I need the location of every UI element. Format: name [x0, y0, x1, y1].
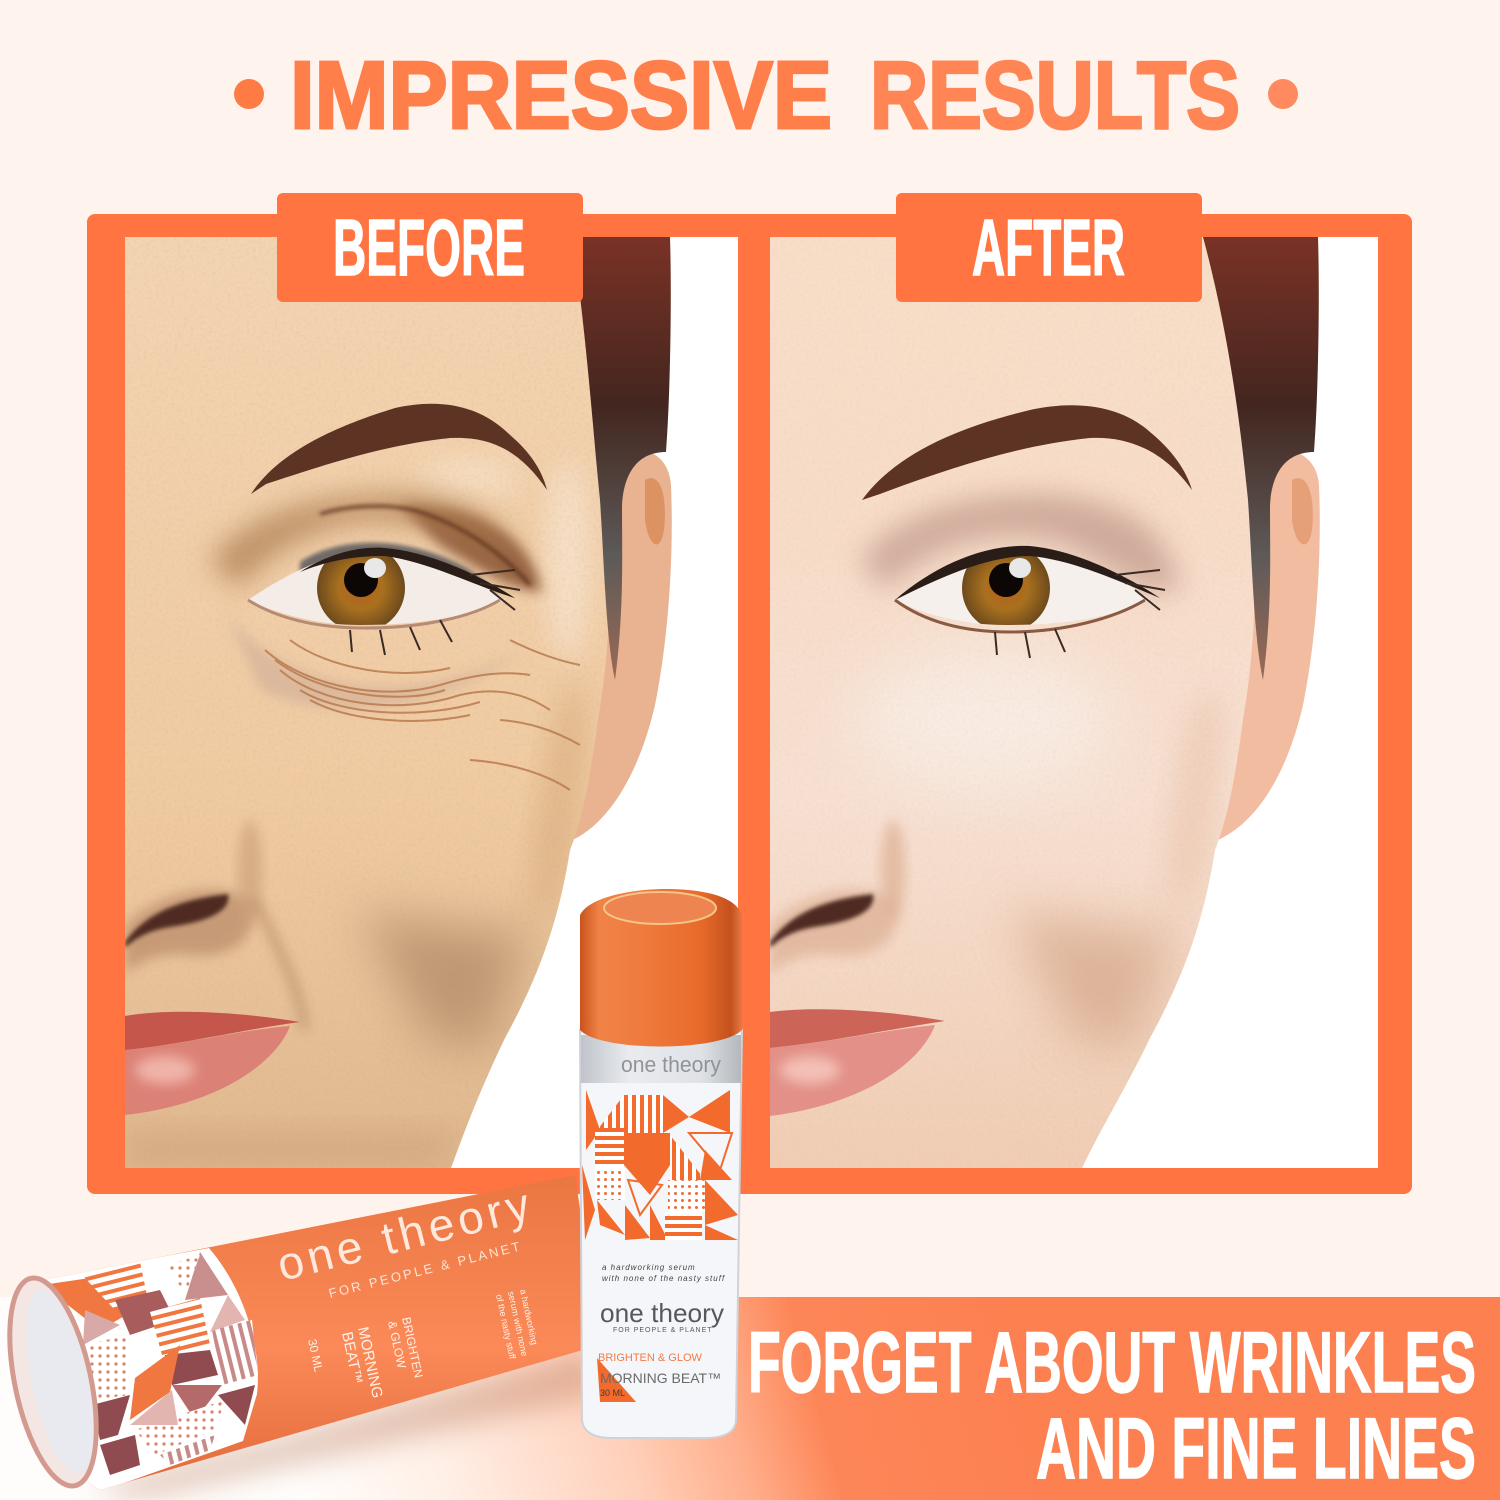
panel: before photo	[125, 237, 738, 1168]
bottle pattern	[582, 1090, 738, 1240]
lash line	[300, 548, 515, 598]
bottom gradient band	[0, 1297, 1500, 1500]
label: before: BEFORE	[333, 203, 525, 292]
tube body	[26, 1175, 600, 1490]
tube side copy: 30 ML	[305, 1338, 326, 1374]
tube tagline: FOR PEOPLE & PLANET	[327, 1238, 524, 1301]
lashes	[350, 570, 520, 655]
eye socket shadow	[400, 505, 542, 592]
tube side copy: BRIGHTEN	[399, 1316, 426, 1379]
eye white	[248, 550, 505, 625]
cap top	[604, 892, 716, 924]
under-eye wrinkles	[265, 640, 580, 790]
bottle corner triangle	[597, 1358, 636, 1402]
lips	[770, 1009, 945, 1116]
pupil	[344, 563, 378, 597]
skin	[770, 237, 1255, 1168]
tube shadow	[90, 1350, 600, 1500]
eyebrow	[862, 405, 1192, 500]
tube side copy: a hardworking	[518, 1288, 540, 1346]
lashes	[995, 570, 1165, 658]
ear	[1218, 454, 1320, 840]
bottle body	[580, 1030, 742, 1438]
temple highlight	[548, 460, 588, 660]
hair	[1203, 237, 1319, 680]
bottle variant copy: MORNING BEAT™	[600, 1370, 721, 1386]
catchlight	[364, 558, 386, 578]
crease	[320, 506, 530, 585]
title word one: IMPRESSIVE	[290, 42, 832, 149]
eyebrow	[251, 404, 547, 494]
iris	[962, 544, 1050, 632]
panel: after photo	[770, 237, 1378, 1168]
eye	[895, 544, 1165, 658]
nose wing shade	[881, 820, 905, 920]
band logo: one theory	[621, 1052, 721, 1077]
tube side copy: of the nasty stuff	[494, 1293, 518, 1360]
nose underside shade	[770, 890, 898, 975]
tube side copy	[305, 1288, 540, 1400]
title word two: RESULTS	[870, 42, 1240, 149]
bottle variant copy: 30 ML	[600, 1388, 625, 1398]
eye	[248, 543, 520, 655]
label: after	[896, 193, 1202, 302]
bottle copy: one theory	[600, 1298, 724, 1328]
eye socket shadow	[860, 494, 1180, 592]
brow bone highlight	[420, 460, 520, 496]
tube end rim	[0, 1270, 112, 1494]
bottle copy: a hardworking serum	[602, 1263, 696, 1272]
tube logo: one theory	[272, 1178, 535, 1291]
bottle copy: FOR PEOPLE & PLANET	[613, 1327, 713, 1334]
eye white	[895, 550, 1150, 625]
lips	[125, 1012, 300, 1115]
skin grain	[136, 239, 593, 641]
tube side copy: BEAT™	[338, 1330, 366, 1386]
comparison frame	[87, 214, 1412, 1194]
tube side copy: MORNING	[354, 1325, 386, 1400]
nose underside shade	[125, 890, 253, 975]
title bullet right	[1268, 79, 1298, 109]
ear	[574, 454, 672, 840]
tube side copy: serum with none	[506, 1290, 530, 1357]
lower lip	[125, 1026, 290, 1115]
label: before	[277, 193, 583, 302]
title bullet left	[234, 79, 264, 109]
bottle copy: with none of the nasty stuff	[602, 1274, 725, 1283]
iris	[317, 556, 405, 625]
tube end cap	[13, 1284, 107, 1480]
hair	[572, 237, 671, 680]
product: serum bottle	[580, 889, 742, 1438]
bottle copy	[600, 1263, 725, 1334]
bottom headline	[748, 1315, 1476, 1497]
nostril	[125, 894, 228, 948]
nose	[770, 820, 905, 975]
jaw and cheek shadow	[360, 910, 530, 1050]
skin	[125, 237, 610, 1168]
bottle variant copy	[598, 1352, 721, 1398]
lash line	[895, 546, 1160, 600]
bottle variant copy: BRIGHTEN & GLOW	[598, 1352, 703, 1364]
nasolabial fold	[255, 900, 305, 1030]
skin grain	[770, 237, 1270, 1168]
nose wing shade	[238, 820, 262, 920]
nose	[125, 820, 262, 975]
upper lip	[770, 1009, 945, 1048]
nostril	[770, 894, 873, 948]
tube side copy: & GLOW	[385, 1320, 409, 1370]
under-eye highlight	[855, 650, 1115, 790]
catchlight	[1009, 558, 1031, 578]
product: box tube	[0, 1175, 600, 1500]
upper lip	[125, 1012, 300, 1050]
cap	[580, 889, 742, 1046]
lower lip	[770, 1025, 935, 1116]
pupil	[989, 563, 1023, 597]
silver band	[581, 1035, 741, 1083]
upper lid	[300, 543, 500, 595]
tube pattern	[10, 1248, 258, 1495]
title	[234, 42, 1298, 149]
cheek contour	[1010, 910, 1175, 1050]
label: after: AFTER	[972, 203, 1125, 292]
